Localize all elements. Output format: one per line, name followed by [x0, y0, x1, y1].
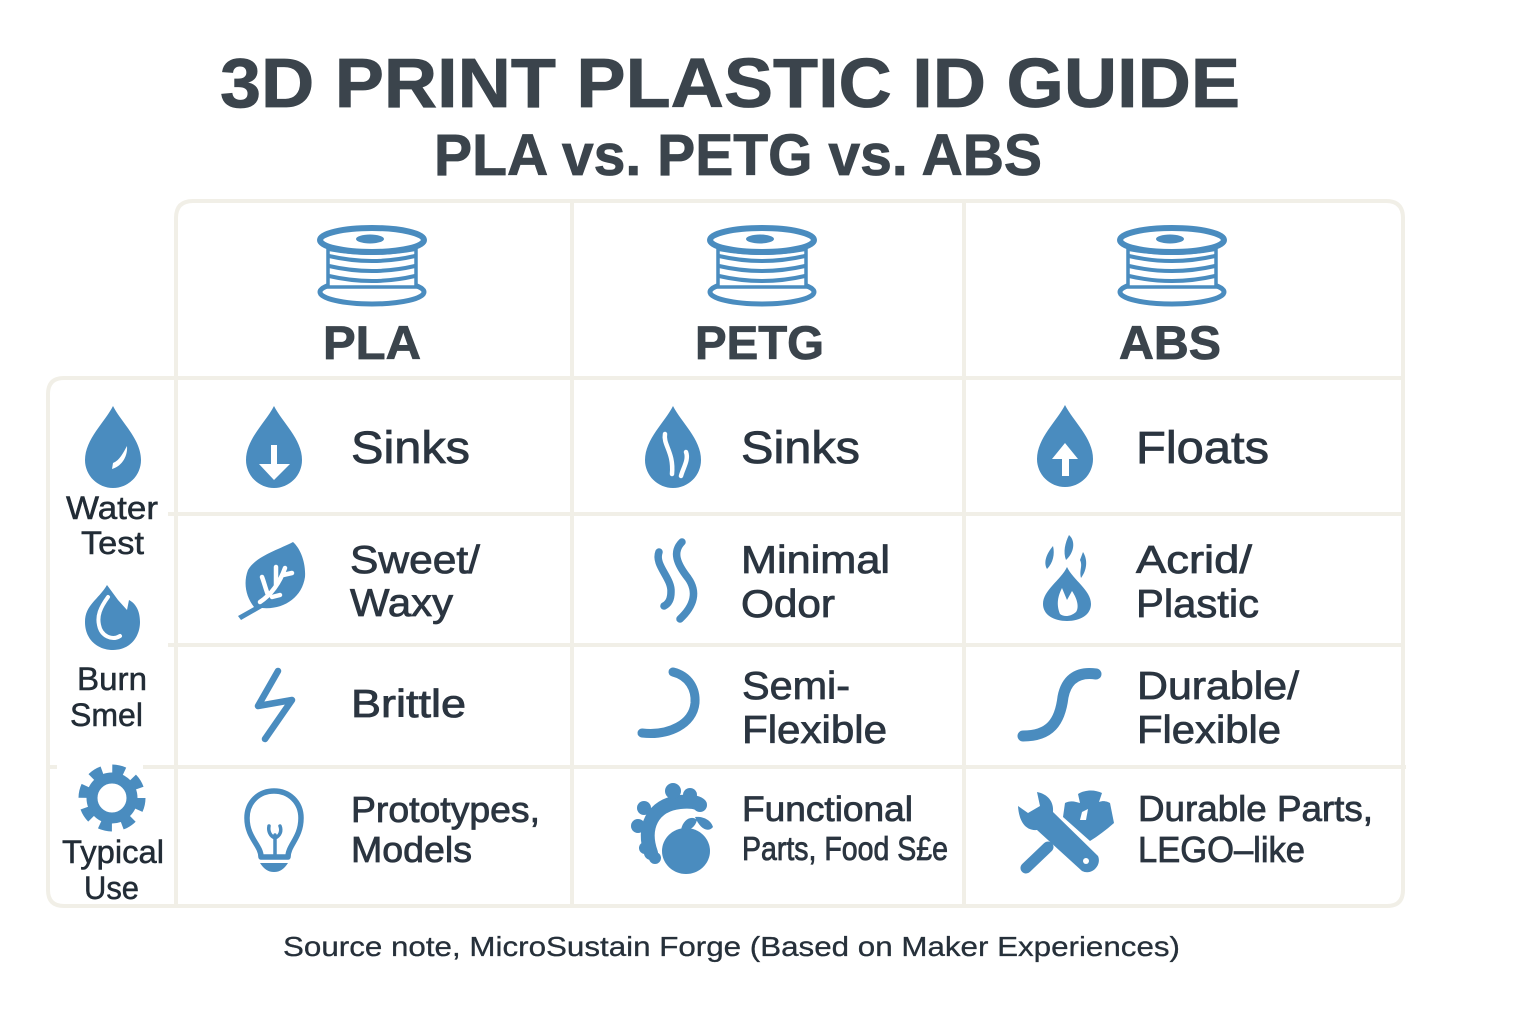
- text: functional parts food safe: Functional: [742, 790, 913, 829]
- ABS burn smell cell: [1043, 535, 1259, 626]
- text: sweet waxy: Waxy: [350, 582, 454, 625]
- text: prototypes models: Prototypes,: [351, 789, 540, 830]
- PETG heading: PETG: [695, 316, 824, 369]
- icon: water drop: [85, 406, 141, 488]
- text: semi-flexible: Flexible: [742, 709, 887, 752]
- subtitle: PLA vs. PETG vs. ABS: [434, 123, 1042, 188]
- icon: wrench and puzzle piece: [1018, 790, 1114, 872]
- row label: burn smell: [70, 661, 147, 733]
- PLA water test cell: [246, 406, 470, 488]
- text: functional parts food safe: [742, 790, 948, 867]
- text: brittle: Brittle: [351, 683, 466, 726]
- text: prototypes models: [351, 789, 540, 870]
- icon: semi-flexible arc: [642, 672, 695, 733]
- PLA burn smell cell: [238, 539, 480, 625]
- column header: ABS: [1119, 228, 1224, 369]
- PLA typical use cell: [247, 789, 540, 872]
- icon: drop with up arrow: [1037, 405, 1093, 487]
- text: durable parts lego-like: [1138, 788, 1373, 870]
- ABS heading: ABS: [1119, 316, 1221, 369]
- text: minimal odor: Odor: [741, 583, 835, 626]
- text: functional parts food safe: Parts, Food S£e: [742, 830, 948, 867]
- icon: faint odor waves: [658, 542, 694, 619]
- text: acrid plastic: Plastic: [1136, 583, 1259, 626]
- PLA heading: PLA: [323, 316, 421, 369]
- icon: lightning bolt: [258, 671, 292, 739]
- source note: Source note, MicroSustain Forge (Based on Maker Experiences): [283, 931, 1180, 962]
- icon: gear with apple: [631, 783, 713, 874]
- text: sweet waxy: Sweet/: [350, 539, 480, 582]
- text: sinks: Sinks: [741, 422, 860, 473]
- row label: typical use: [62, 834, 164, 906]
- text: semi-flexible: [742, 665, 887, 752]
- icon: drop with wavy lines: [645, 406, 701, 488]
- row label: water test: Water: [66, 490, 158, 526]
- icon: drop with down arrow: [246, 406, 302, 488]
- row label: water test: [66, 490, 158, 561]
- icon: flexible S-curve: [1023, 673, 1096, 736]
- text: durable parts lego-like: LEGO–like: [1138, 829, 1305, 870]
- PETG water test cell: [645, 406, 860, 488]
- icon: leaf: [238, 542, 305, 620]
- PLA flexibility cell: [258, 671, 466, 739]
- text: durable flexible: [1137, 665, 1299, 752]
- title: 3D PRINT PLASTIC ID GUIDE: [220, 44, 1240, 122]
- icon: flame: [85, 585, 140, 650]
- row labels column: [62, 406, 164, 906]
- row label: typical use: Typical: [62, 834, 164, 870]
- text: sinks: Sinks: [351, 422, 470, 473]
- text: floats: Floats: [1136, 422, 1269, 473]
- icon: acrid flame with smoke: [1043, 535, 1091, 621]
- text: minimal odor: [741, 539, 890, 626]
- ABS flexibility cell: [1023, 665, 1299, 752]
- text: semi-flexible: Semi-: [742, 665, 850, 708]
- row label: typical use: Use: [84, 870, 139, 906]
- text: durable parts lego-like: Durable Parts,: [1138, 788, 1373, 829]
- row label: burn smell: Burn: [77, 661, 147, 697]
- text: minimal odor: Minimal: [741, 539, 890, 582]
- comparison table grid: [48, 201, 1406, 906]
- text: durable flexible: Durable/: [1137, 665, 1299, 708]
- column header: PETG: [695, 228, 824, 369]
- PETG burn smell cell: [658, 539, 890, 626]
- icon: PLA filament spool: [320, 228, 424, 304]
- text: prototypes models: Models: [351, 829, 472, 870]
- text: durable flexible: Flexible: [1137, 709, 1281, 752]
- row label: burn smell: Smel: [70, 697, 143, 733]
- PETG typical use cell: [631, 783, 948, 874]
- icon: light bulb: [247, 791, 301, 872]
- icon: PETG filament spool: [710, 228, 814, 304]
- ABS water test cell: [1037, 405, 1269, 487]
- row label: water test: Test: [81, 525, 144, 561]
- text: sweet waxy: [350, 539, 480, 625]
- column header: PLA: [320, 228, 424, 369]
- icon: gear: [84, 770, 140, 826]
- text: acrid plastic: [1136, 539, 1259, 626]
- text: acrid plastic: Acrid/: [1136, 539, 1252, 582]
- icon: ABS filament spool: [1120, 228, 1224, 304]
- ABS typical use cell: [1018, 788, 1373, 872]
- PETG flexibility cell: [642, 665, 887, 752]
